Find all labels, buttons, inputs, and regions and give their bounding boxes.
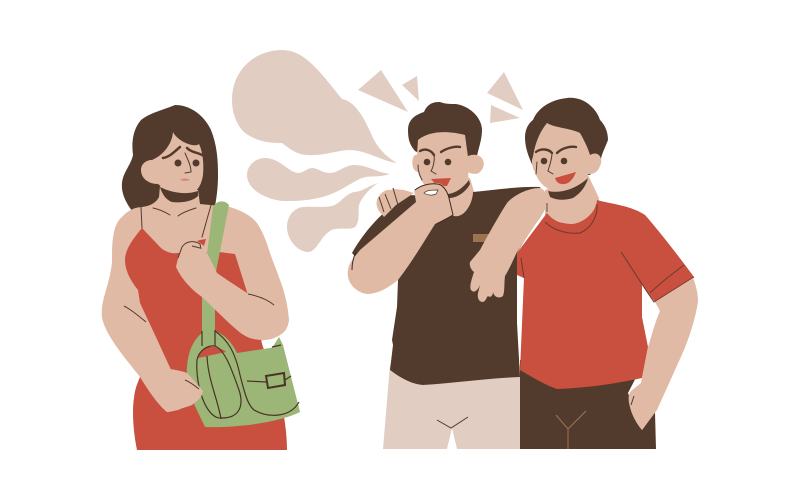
man 1 raised arm: [348, 183, 453, 294]
sound triangle 1: [358, 70, 408, 112]
woman hair: [122, 105, 218, 214]
man 2 trouser seam: [556, 411, 586, 449]
man 1 red mouth: [431, 178, 451, 186]
smoke and whistle sound: [232, 50, 523, 252]
sound triangle 2: [402, 76, 419, 101]
man in dark shirt: [348, 102, 547, 449]
woman neck shadow: [160, 187, 198, 202]
smoke: middle puff: [247, 158, 390, 201]
man 1 neck shadow: [447, 180, 470, 198]
sound triangle 3: [487, 72, 523, 110]
man 2 neck: [545, 175, 599, 226]
bag shoulder strap: [202, 201, 229, 347]
woman lower hand: [140, 369, 203, 412]
man 1 right ear: [467, 155, 482, 173]
man 2 arm line: [546, 203, 548, 212]
smoke: lower puff: [287, 183, 378, 252]
man 2 shirt line details: [521, 204, 694, 311]
man 1 face: [412, 132, 484, 197]
red necklace pendant: [197, 239, 206, 246]
man 2 arm over shoulder: [470, 188, 547, 302]
hand crease: [185, 380, 199, 389]
woman facial features: [141, 147, 212, 237]
bag line work: [197, 330, 299, 419]
man 1 whistle fingers detail: [352, 184, 453, 270]
man 2 pocket thumb line: [631, 396, 634, 405]
woman raised forearm and fist: [176, 241, 285, 340]
man 2 lower arm: [629, 278, 698, 430]
green bag: [187, 331, 300, 427]
smoke: large puff: [232, 50, 397, 163]
bag pocket red opening: [198, 346, 226, 358]
man 2 smiling mouth: [555, 172, 576, 184]
woman mouth: [180, 178, 190, 181]
man 2 neck shadow: [548, 178, 588, 200]
man 1 hair: [408, 102, 482, 170]
man 1 whistle: [424, 190, 438, 195]
man 1 neck: [430, 178, 475, 221]
man in red shirt: [470, 98, 698, 449]
woman hand and arm creases: [124, 242, 274, 322]
man 1 eyebrows and nose: [418, 147, 460, 180]
man 2 hair: [525, 98, 608, 175]
man 2 eyes: [541, 158, 567, 164]
man 1 eyes: [424, 159, 451, 165]
woman dress: [125, 228, 287, 450]
man 2 red shirt: [517, 200, 694, 389]
woman body skin: [102, 186, 289, 400]
man 2 trousers: [520, 360, 656, 449]
man 2 face: [532, 123, 601, 192]
woman: [102, 105, 300, 450]
sound triangle 4: [490, 105, 520, 123]
man 1 shirt: [352, 187, 547, 385]
man 1 shirt badge: [473, 234, 489, 242]
man 1 trousers: [383, 365, 521, 449]
woman eyes: [174, 160, 200, 166]
man 1 far hand: [377, 188, 414, 217]
man 2 eyebrows and nose: [536, 147, 576, 174]
woman face: [141, 132, 203, 194]
bag strap back: [270, 337, 285, 360]
